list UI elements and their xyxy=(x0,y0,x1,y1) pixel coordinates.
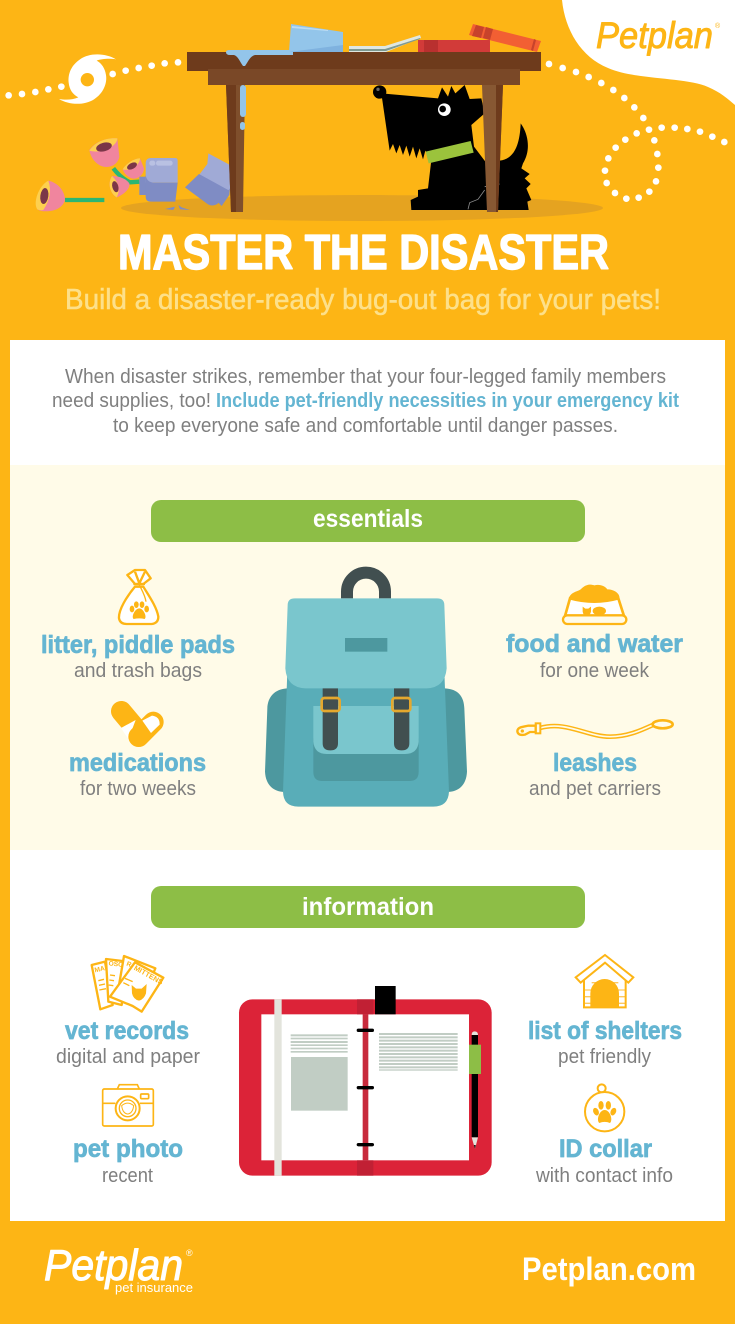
panel: essentials xyxy=(10,465,725,850)
item: vet records: vet records xyxy=(65,1017,189,1045)
icon: litter bag xyxy=(119,570,158,624)
icon: records xyxy=(92,956,165,1012)
dog eye xyxy=(438,103,451,116)
item: litter xyxy=(41,570,235,682)
header logo corner xyxy=(562,0,735,105)
white content panel xyxy=(10,340,725,1221)
icon: camera xyxy=(103,1085,153,1126)
item: shelters: list of shelters xyxy=(528,1017,682,1045)
subtitle: Build a disaster-ready bug-out bag for your pets! xyxy=(65,284,661,316)
footer logo: ® xyxy=(186,1248,193,1258)
backpack illustration xyxy=(265,573,467,807)
heading: essentials xyxy=(151,500,585,542)
item: shelters xyxy=(528,955,682,1068)
item: medications: for two weeks xyxy=(80,778,196,800)
open book xyxy=(349,35,421,52)
table top xyxy=(187,52,541,71)
footer website: Petplan.com xyxy=(522,1251,696,1287)
flower small xyxy=(110,176,129,197)
heading: essentials: essentials xyxy=(313,505,423,533)
item: medications xyxy=(69,711,206,800)
intro text xyxy=(52,366,679,437)
heading: information xyxy=(151,886,585,928)
item: leashes: and pet carriers xyxy=(529,778,661,800)
flower fallen xyxy=(36,181,65,211)
icon: records: MITTENS xyxy=(132,963,165,987)
item: medications: medications xyxy=(69,749,206,777)
item: pet photo xyxy=(73,1085,183,1187)
item: leashes: leashes xyxy=(553,749,637,777)
icon: records: OSC xyxy=(108,960,123,969)
hurricane path dots xyxy=(5,59,728,202)
flower stems xyxy=(65,168,139,200)
table apron xyxy=(208,69,520,85)
item: food: food and water xyxy=(506,630,683,658)
orange book xyxy=(469,24,541,52)
vase upright xyxy=(139,158,178,202)
icon: pills xyxy=(121,711,160,738)
intro text: to keep everyone safe and comfortable until danger passes. xyxy=(113,415,618,437)
dog collar xyxy=(426,141,474,163)
footer logo: pet insurance xyxy=(115,1280,193,1295)
title: MASTER THE DISASTER xyxy=(118,226,609,280)
floor shadow xyxy=(121,195,603,221)
table leg right xyxy=(482,85,503,212)
logo: Petplan: Petplan xyxy=(596,15,713,56)
heading: information: information xyxy=(302,893,434,921)
icon: records: MA xyxy=(94,965,106,974)
intro text: need supplies, too! xyxy=(52,390,211,412)
icon: hurricane xyxy=(59,54,116,104)
logo: Petplan: ® xyxy=(715,22,721,30)
icon: dog house xyxy=(576,955,633,1007)
red book xyxy=(418,40,490,52)
vase tipped xyxy=(165,153,231,210)
item: ID collar: with contact info xyxy=(535,1165,673,1187)
item: leashes xyxy=(517,720,673,800)
item: pet photo: recent xyxy=(102,1165,153,1187)
panel: information xyxy=(56,886,682,1187)
flower middle xyxy=(123,158,144,179)
intro text: Include pet-friendly necessities in your emergency kit xyxy=(216,390,679,412)
item: food xyxy=(506,585,683,682)
scene: broken vase and flowers xyxy=(36,138,231,211)
icon: records: R xyxy=(125,961,132,969)
table xyxy=(187,52,541,212)
item: ID collar xyxy=(535,1084,673,1187)
flower large xyxy=(89,138,119,167)
item: litter: litter, piddle pads xyxy=(41,631,235,659)
icon: leash xyxy=(517,720,673,737)
table leg left xyxy=(226,85,245,212)
item: shelters: pet friendly xyxy=(558,1046,651,1068)
item: vet records xyxy=(56,956,200,1068)
dog xyxy=(373,85,531,210)
item: food: for one week xyxy=(540,660,650,682)
footer logo: Petplan xyxy=(44,1241,183,1290)
organizer illustration xyxy=(239,986,492,1176)
icon: ID tag xyxy=(585,1084,624,1131)
item: vet records: digital and paper xyxy=(56,1046,200,1068)
icon: food bowl xyxy=(563,585,626,624)
intro text: When disaster strikes, remember that your four-legged family members xyxy=(65,366,666,388)
cup xyxy=(289,24,343,52)
item: ID collar: ID collar xyxy=(559,1135,652,1163)
item: litter: and trash bags xyxy=(74,660,202,682)
item: pet photo: pet photo xyxy=(73,1135,183,1163)
water spill xyxy=(226,50,293,130)
